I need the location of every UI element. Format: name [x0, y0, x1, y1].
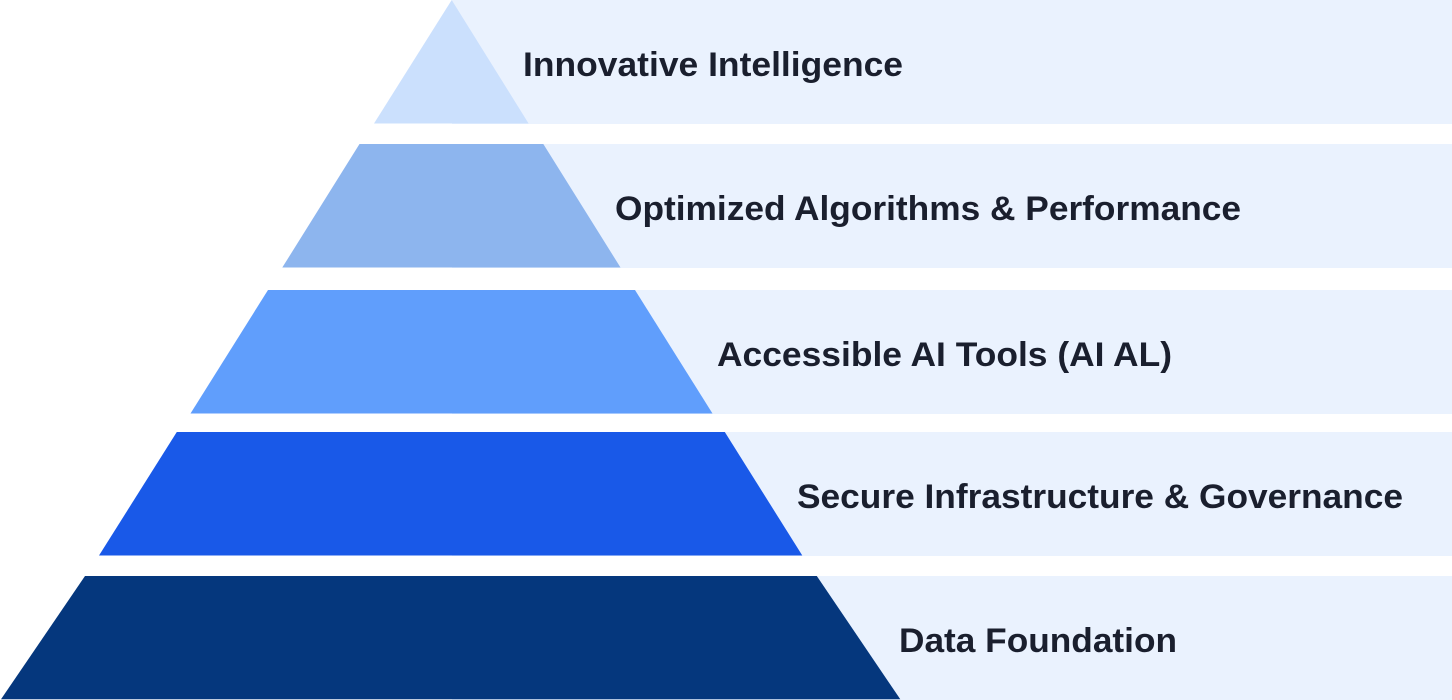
tier 2: Secure Infrastructure & Governance: Secure Infrastructure & Governance [797, 478, 1403, 516]
tier 1: Data Foundation: Data Foundation [899, 622, 1177, 660]
tier 5: Innovative Intelligence [374, 0, 1452, 124]
tier 4: Optimized Algorithms & Performance: Optimized Algorithms & Performance [615, 190, 1241, 228]
tier 3: Accessible AI Tools (AI AL) [190, 290, 1452, 414]
tier 3: Accessible AI Tools (AI AL): Accessible AI Tools (AI AL) [717, 336, 1172, 374]
tier 4: Optimized Algorithms & Performance [282, 144, 1452, 268]
tier 5: Innovative Intelligence: Innovative Intelligence [523, 46, 903, 84]
tier 1: Data Foundation [1, 576, 1452, 700]
tier 2: Secure Infrastructure & Governance [99, 432, 1452, 556]
